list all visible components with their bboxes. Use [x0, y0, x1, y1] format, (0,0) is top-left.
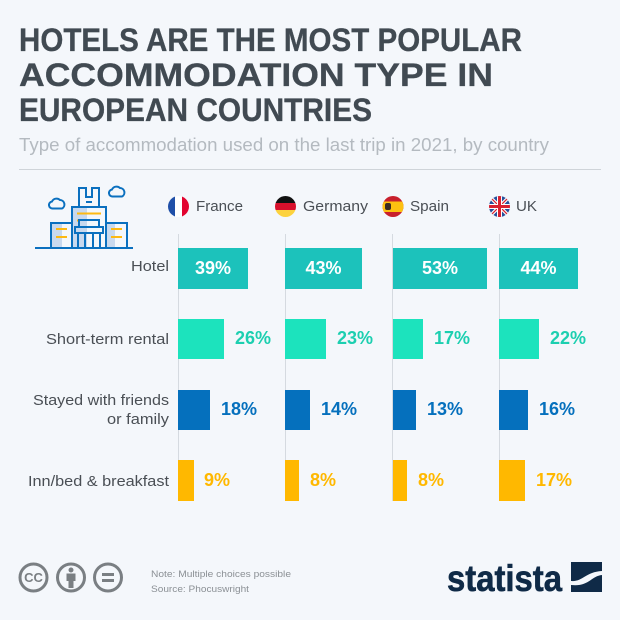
bar chart: France: 9%	[204, 470, 230, 490]
note and source	[151, 569, 291, 595]
bar chart: Germany: 23%	[337, 328, 373, 348]
title	[19, 22, 522, 128]
bar chart: France: 39%	[195, 258, 231, 278]
bar chart: Germany: 8%	[310, 470, 336, 490]
subtitle: Type of accommodation used on the last trip in 2021, by country	[19, 135, 549, 155]
bar chart: UK: 16%	[539, 399, 575, 419]
bar chart: France: 18%	[221, 399, 257, 419]
bar chart: UK: 17%	[536, 470, 572, 490]
column header: Spain	[382, 196, 449, 217]
bar chart: Spain: 8%	[418, 470, 444, 490]
column header: France: France	[196, 198, 243, 215]
bar chart: Germany	[285, 248, 373, 501]
bar chart: Spain: 53%	[422, 258, 458, 278]
icon: hotel building	[35, 187, 133, 248]
column header: France	[168, 196, 243, 217]
row labels	[28, 259, 170, 490]
column header: Germany: Germany	[303, 198, 369, 215]
bar chart: France: 26%	[235, 328, 271, 348]
row labels: or family	[107, 412, 170, 428]
bar chart: UK: 44%	[520, 258, 557, 278]
bar chart: Germany: 43%	[305, 258, 342, 278]
column header: UK	[489, 196, 537, 217]
column header: UK: UK	[516, 198, 537, 215]
bar chart: UK: 22%	[550, 328, 586, 348]
title: ACCOMMODATION TYPE IN	[19, 57, 493, 93]
title: EUROPEAN COUNTRIES	[19, 92, 372, 128]
bar chart: Spain: 13%	[427, 399, 463, 419]
row labels: Inn/bed & breakfast	[28, 474, 169, 490]
icon: creative commons licence	[20, 564, 122, 591]
bar chart: Spain: 17%	[434, 328, 470, 348]
title: HOTELS ARE THE MOST POPULAR	[19, 22, 522, 58]
column header: Spain: Spain	[410, 198, 449, 215]
bar chart: UK	[499, 248, 586, 501]
bar chart: Spain	[393, 248, 487, 501]
note and source: Note: Multiple choices possible	[151, 569, 291, 580]
row labels: Hotel	[131, 259, 169, 275]
statista logo: statista	[447, 558, 562, 599]
bar chart: France	[178, 248, 271, 501]
row labels: Short-term rental	[46, 332, 169, 348]
note and source: Source: Phocuswright	[151, 584, 249, 595]
icon: creative commons licence: CC	[24, 570, 43, 585]
column header: Germany	[275, 196, 369, 217]
row labels: Stayed with friends	[33, 393, 169, 409]
bar chart: Germany: 14%	[321, 399, 357, 419]
